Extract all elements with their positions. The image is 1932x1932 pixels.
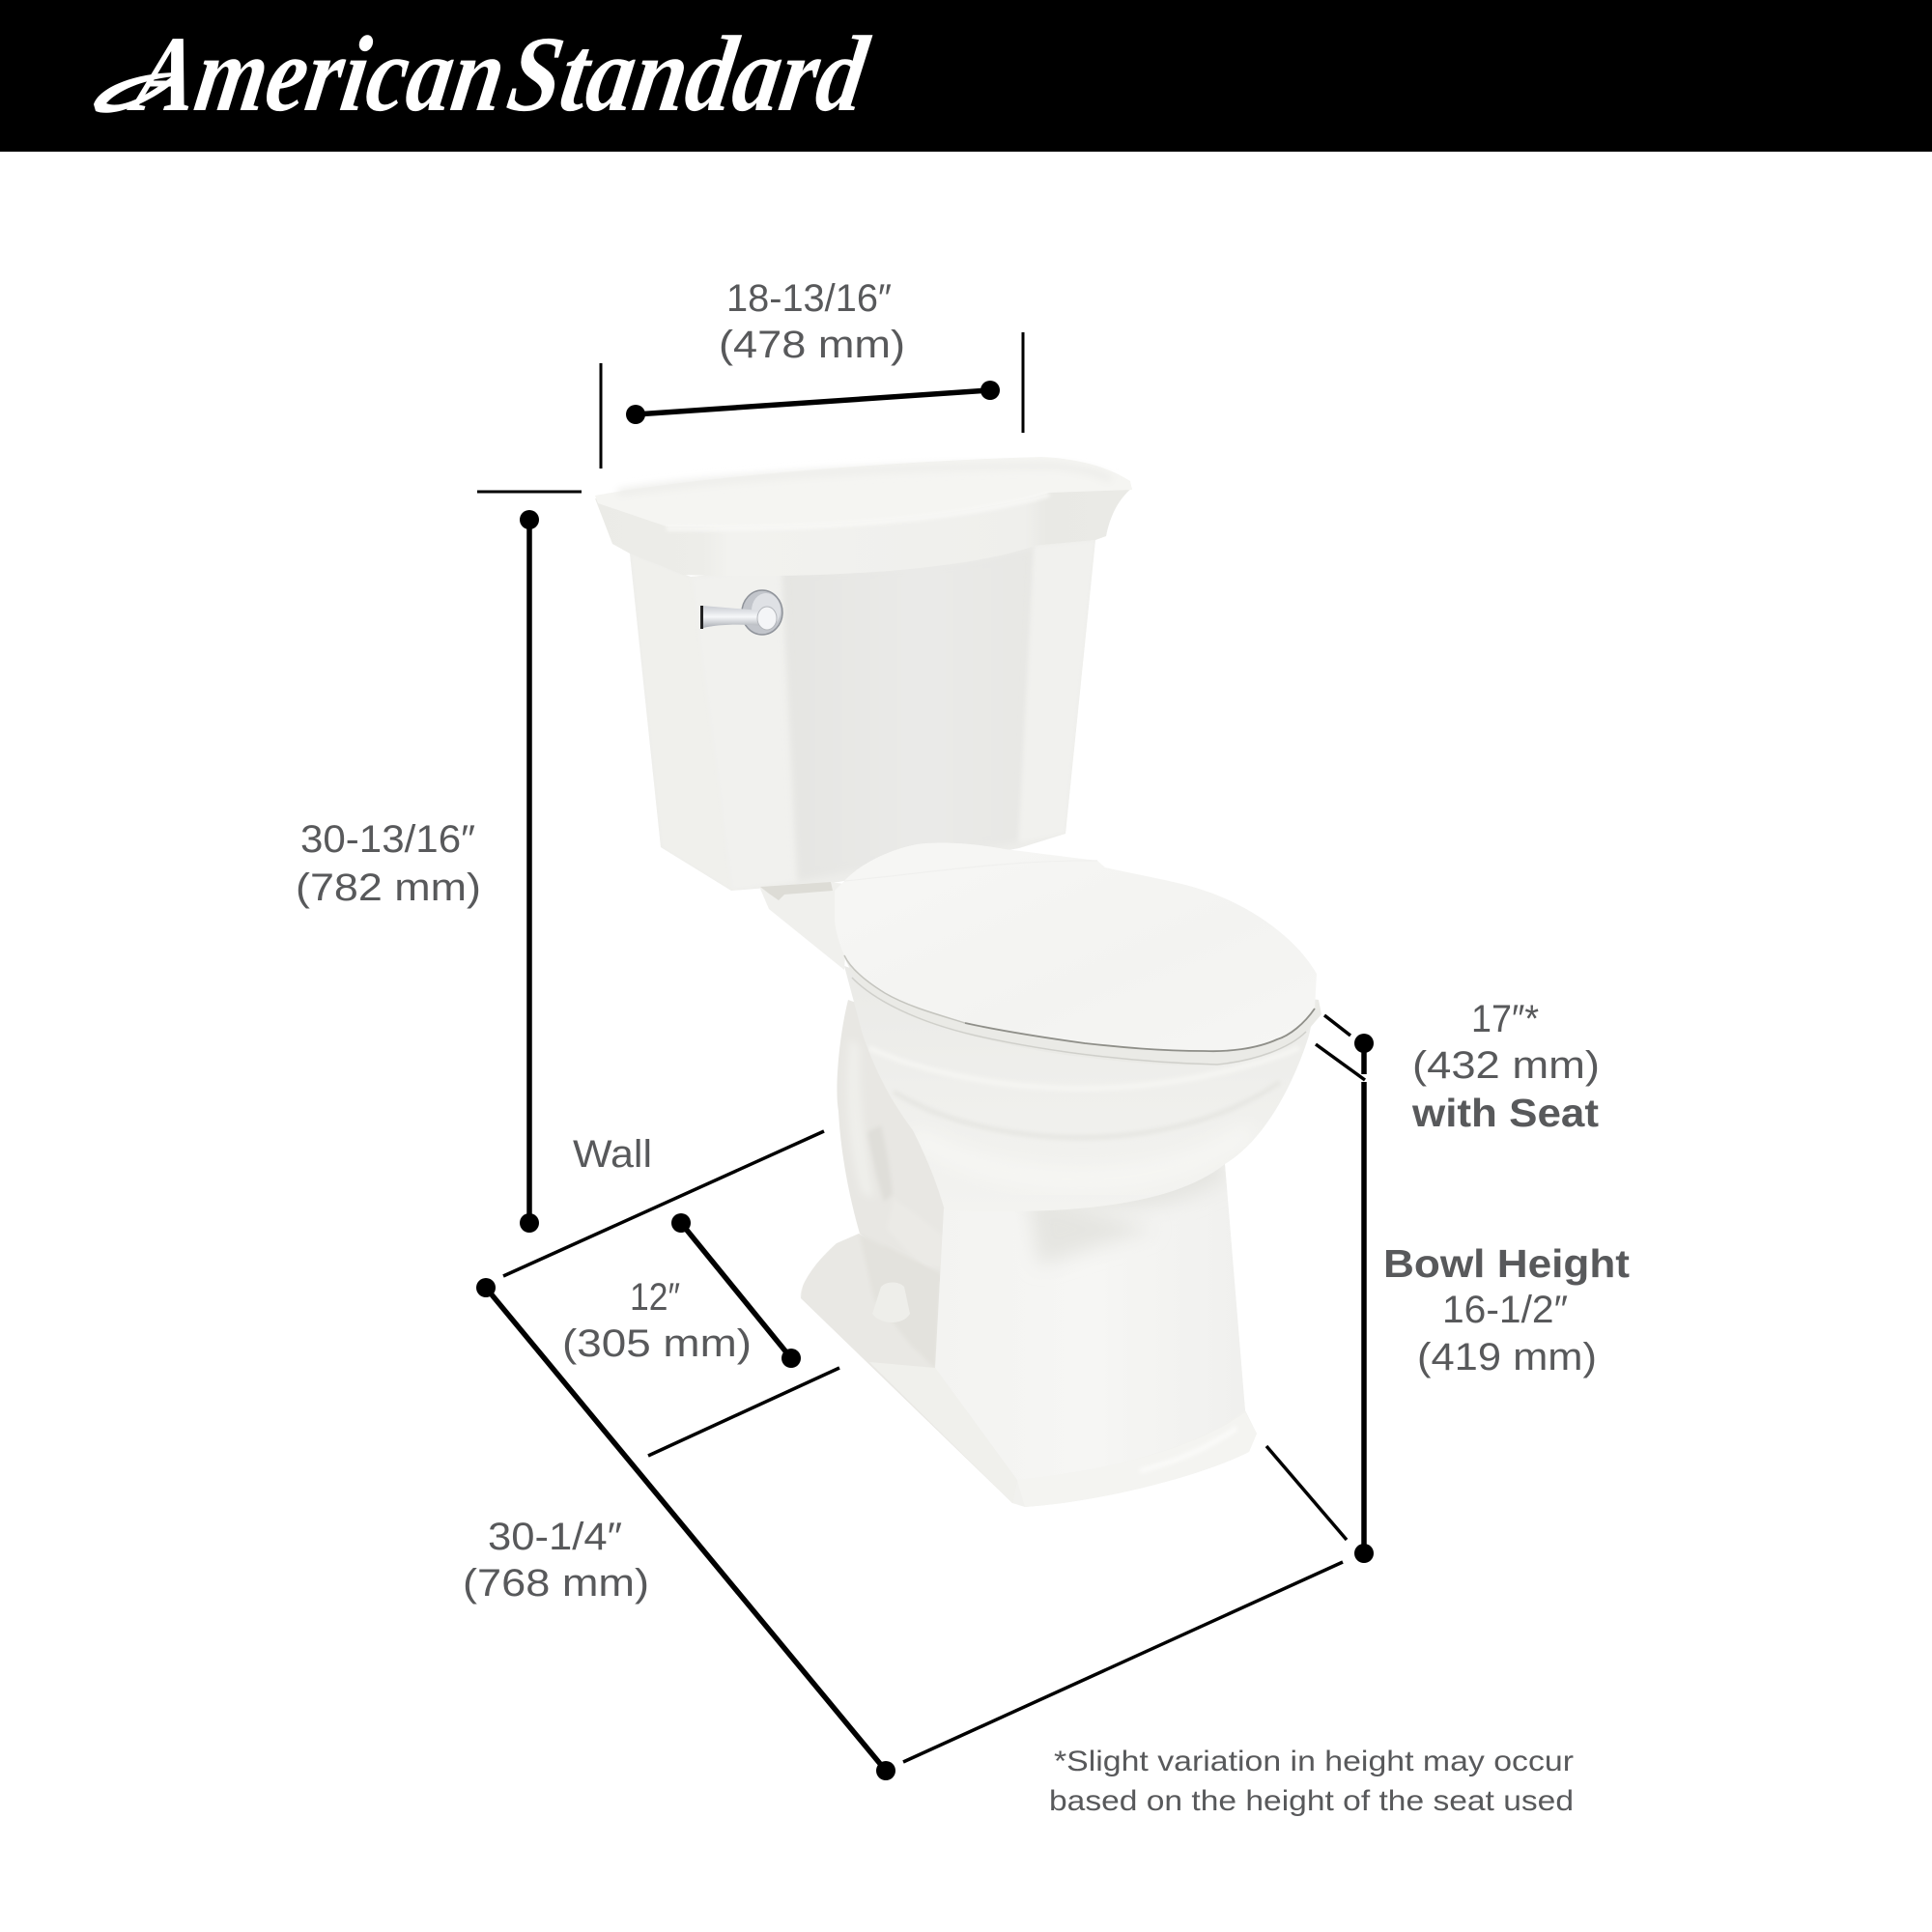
label: with seat: 17″*: [1471, 998, 1539, 1040]
footnote: [1049, 1746, 1574, 1817]
label: with seat: (432 mm): [1412, 1044, 1600, 1087]
bolt cap: [872, 1283, 910, 1322]
label: [463, 1516, 649, 1605]
seat ring: [840, 942, 1321, 1065]
label: 30-1/4″: [488, 1516, 622, 1558]
toilet seat lid: [835, 843, 1317, 1051]
front extension line: [1266, 1446, 1347, 1540]
label: (768 mm): [463, 1562, 649, 1605]
wall reference line: [503, 1131, 824, 1276]
seat extension ticks: [1316, 1015, 1365, 1080]
wall label: Wall: [573, 1133, 652, 1176]
label: [296, 818, 481, 909]
label: 18-13/16″: [726, 277, 892, 320]
label: (782 mm): [296, 867, 481, 909]
tank-to-bowl neck: [760, 882, 850, 970]
extension line: [648, 1368, 839, 1456]
header banner: [0, 0, 1932, 152]
extension line: [477, 491, 582, 493]
label: 30-13/16″: [300, 818, 475, 861]
toilet illustration: [595, 457, 1321, 1507]
label: [562, 1276, 752, 1365]
tank lid: [595, 457, 1132, 576]
bowl: [844, 966, 1315, 1211]
extension lines: [601, 332, 1023, 469]
logo: American Standard: Standard: [500, 15, 876, 134]
flush lever: [700, 590, 782, 635]
dimension: overall depth: [463, 1278, 895, 1780]
label: (478 mm): [719, 324, 905, 366]
label: [719, 277, 905, 366]
pedestal and base: [801, 1154, 1257, 1507]
label: with seat: with Seat: [1411, 1091, 1599, 1135]
label: bowl height: (419 mm): [1417, 1336, 1597, 1378]
floor reference line: [903, 1562, 1343, 1762]
footnote: *Slight variation in height may occur: [1054, 1746, 1574, 1777]
label: bowl height: 16-1/2″: [1442, 1289, 1568, 1331]
dimension line with end dots: [520, 510, 539, 1233]
dimension: rough-in: [562, 1213, 839, 1456]
footnote: based on the height of the seat used: [1049, 1785, 1574, 1817]
label: (305 mm): [562, 1322, 752, 1365]
dimension line with end dots: [476, 1278, 895, 1780]
dimension: overall height: [296, 492, 582, 1233]
dimension: bowl height with seat: [1316, 998, 1630, 1563]
label: 12″: [630, 1276, 680, 1319]
trapway: [837, 1000, 952, 1372]
label: with seat: [1411, 998, 1600, 1135]
logo: American Standard: [94, 15, 876, 134]
label: bowl height: Bowl Height: [1383, 1241, 1630, 1286]
logo: American Standard: American: [123, 15, 514, 134]
dimension line with end dots: [1354, 1034, 1374, 1563]
dimension line with end dots: [626, 381, 1000, 424]
tank body: [630, 540, 1095, 891]
label: bowl height: [1383, 1241, 1630, 1378]
dimension: tank width: [601, 277, 1023, 469]
dimension line with end dots: [671, 1213, 801, 1368]
